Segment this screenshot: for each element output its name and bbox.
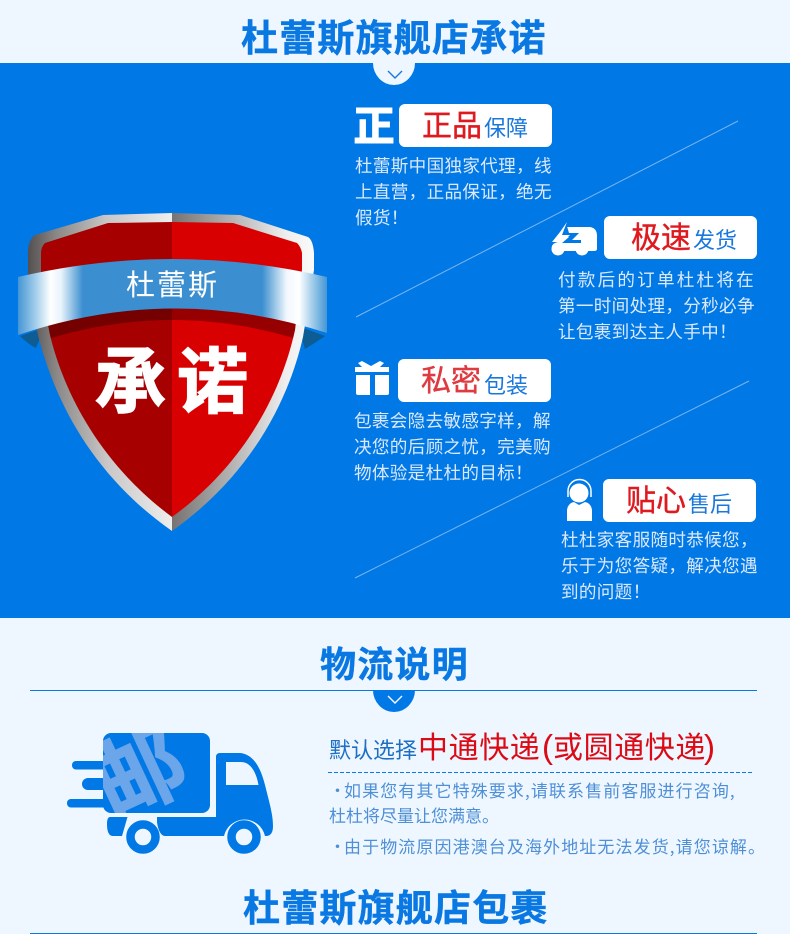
dashed divider: [328, 772, 752, 774]
description: 决您的后顾之忧，完美购: [354, 434, 551, 459]
heading: package: 杜蕾斯旗舰店包裹: [243, 878, 549, 932]
shield rim right: [172, 213, 314, 531]
badge: 贴心: [626, 476, 686, 520]
description: [355, 153, 552, 230]
ribbon label: 杜蕾斯: [126, 262, 219, 304]
diagonal line upper: [356, 121, 738, 317]
heading: logistics: 物流说明: [320, 636, 469, 688]
badge: [399, 101, 552, 147]
promise: private packing: [354, 356, 551, 485]
description: 假货！: [355, 205, 409, 230]
badge: 保障: [484, 111, 528, 143]
description: [561, 527, 758, 604]
panel: promise section: [0, 63, 790, 618]
description: [558, 267, 756, 344]
description: [354, 408, 551, 485]
description: 物体验是杜杜的目标！: [354, 460, 533, 485]
shipping notes: 如果您有其它特殊要求,请联系售前客服进行咨询,: [344, 777, 736, 802]
icon: delivery truck: [67, 733, 273, 854]
badge: 售后: [688, 487, 732, 519]
shipping notes: ·: [329, 833, 347, 858]
icon: fast truck: [552, 222, 597, 256]
description: 杜蕾斯中国独家代理，线: [355, 153, 552, 178]
shipping notes: ·: [329, 777, 347, 802]
badge: 正品: [422, 101, 482, 145]
badge: 发货: [693, 223, 737, 255]
shield face: [41, 222, 302, 517]
cab: [157, 753, 273, 836]
icon: gift: [355, 361, 389, 395]
title: store promise: 杜蕾斯旗舰店承诺: [241, 8, 547, 62]
shield headline: 承诺: [95, 326, 259, 428]
shipping carrier heading: 中通快递: [418, 723, 540, 767]
icon: headset agent: [567, 480, 592, 521]
blue background: [0, 63, 790, 618]
shipping notes: 杜杜将尽量让您满意。: [329, 802, 499, 827]
shipping notes: [329, 777, 766, 858]
shipping carrier heading: (: [542, 728, 553, 765]
badge: [604, 213, 757, 259]
badge: [603, 476, 756, 522]
badge: 极速: [631, 213, 691, 257]
description: 第一时间处理，分秒必争: [558, 293, 755, 318]
diagonal line lower: [355, 381, 749, 578]
description: 付款后的订单杜杜将在: [558, 267, 756, 292]
cargo stamp: 邮: [68, 689, 205, 845]
promise: fast delivery: [552, 213, 757, 344]
description: 上直营，正品保证，绝无: [355, 179, 552, 204]
shipping carrier heading: 默认选择: [329, 733, 417, 765]
tab with chevron: [373, 63, 415, 85]
speed lines: [67, 761, 108, 808]
shipping carrier heading: ): [704, 728, 715, 765]
description: 包裹会隐去敏感字样，解: [354, 408, 551, 433]
promise: genuine: [353, 93, 552, 230]
header rule with chevron tab: [30, 690, 757, 712]
shipping notes: 由于物流原因港澳台及海外地址无法发货,请您谅解。: [344, 833, 766, 858]
description: 杜杜家客服随时恭候您，: [561, 527, 758, 552]
description: 乐于为您答疑，解决您遇: [561, 553, 758, 578]
badge: [398, 356, 551, 402]
shipping carrier heading: 或圆通快递: [553, 723, 706, 767]
bottom rule: [30, 932, 757, 934]
badge: 私密: [421, 356, 481, 400]
shield rim left: [28, 213, 172, 531]
shield emblem: [18, 213, 327, 531]
promise: after-sales: [561, 476, 758, 604]
description: 到的问题！: [561, 579, 650, 604]
ribbon tails: [20, 326, 325, 349]
shipping carrier heading: [329, 723, 715, 767]
badge: 包装: [484, 368, 528, 400]
icon: genuine: 正: [353, 93, 395, 154]
ribbon: [18, 259, 327, 335]
description: 让包裹到达主人手中！: [558, 319, 737, 344]
wheels: [130, 824, 256, 850]
cargo box: [103, 733, 210, 813]
rear bumper: [107, 817, 128, 836]
